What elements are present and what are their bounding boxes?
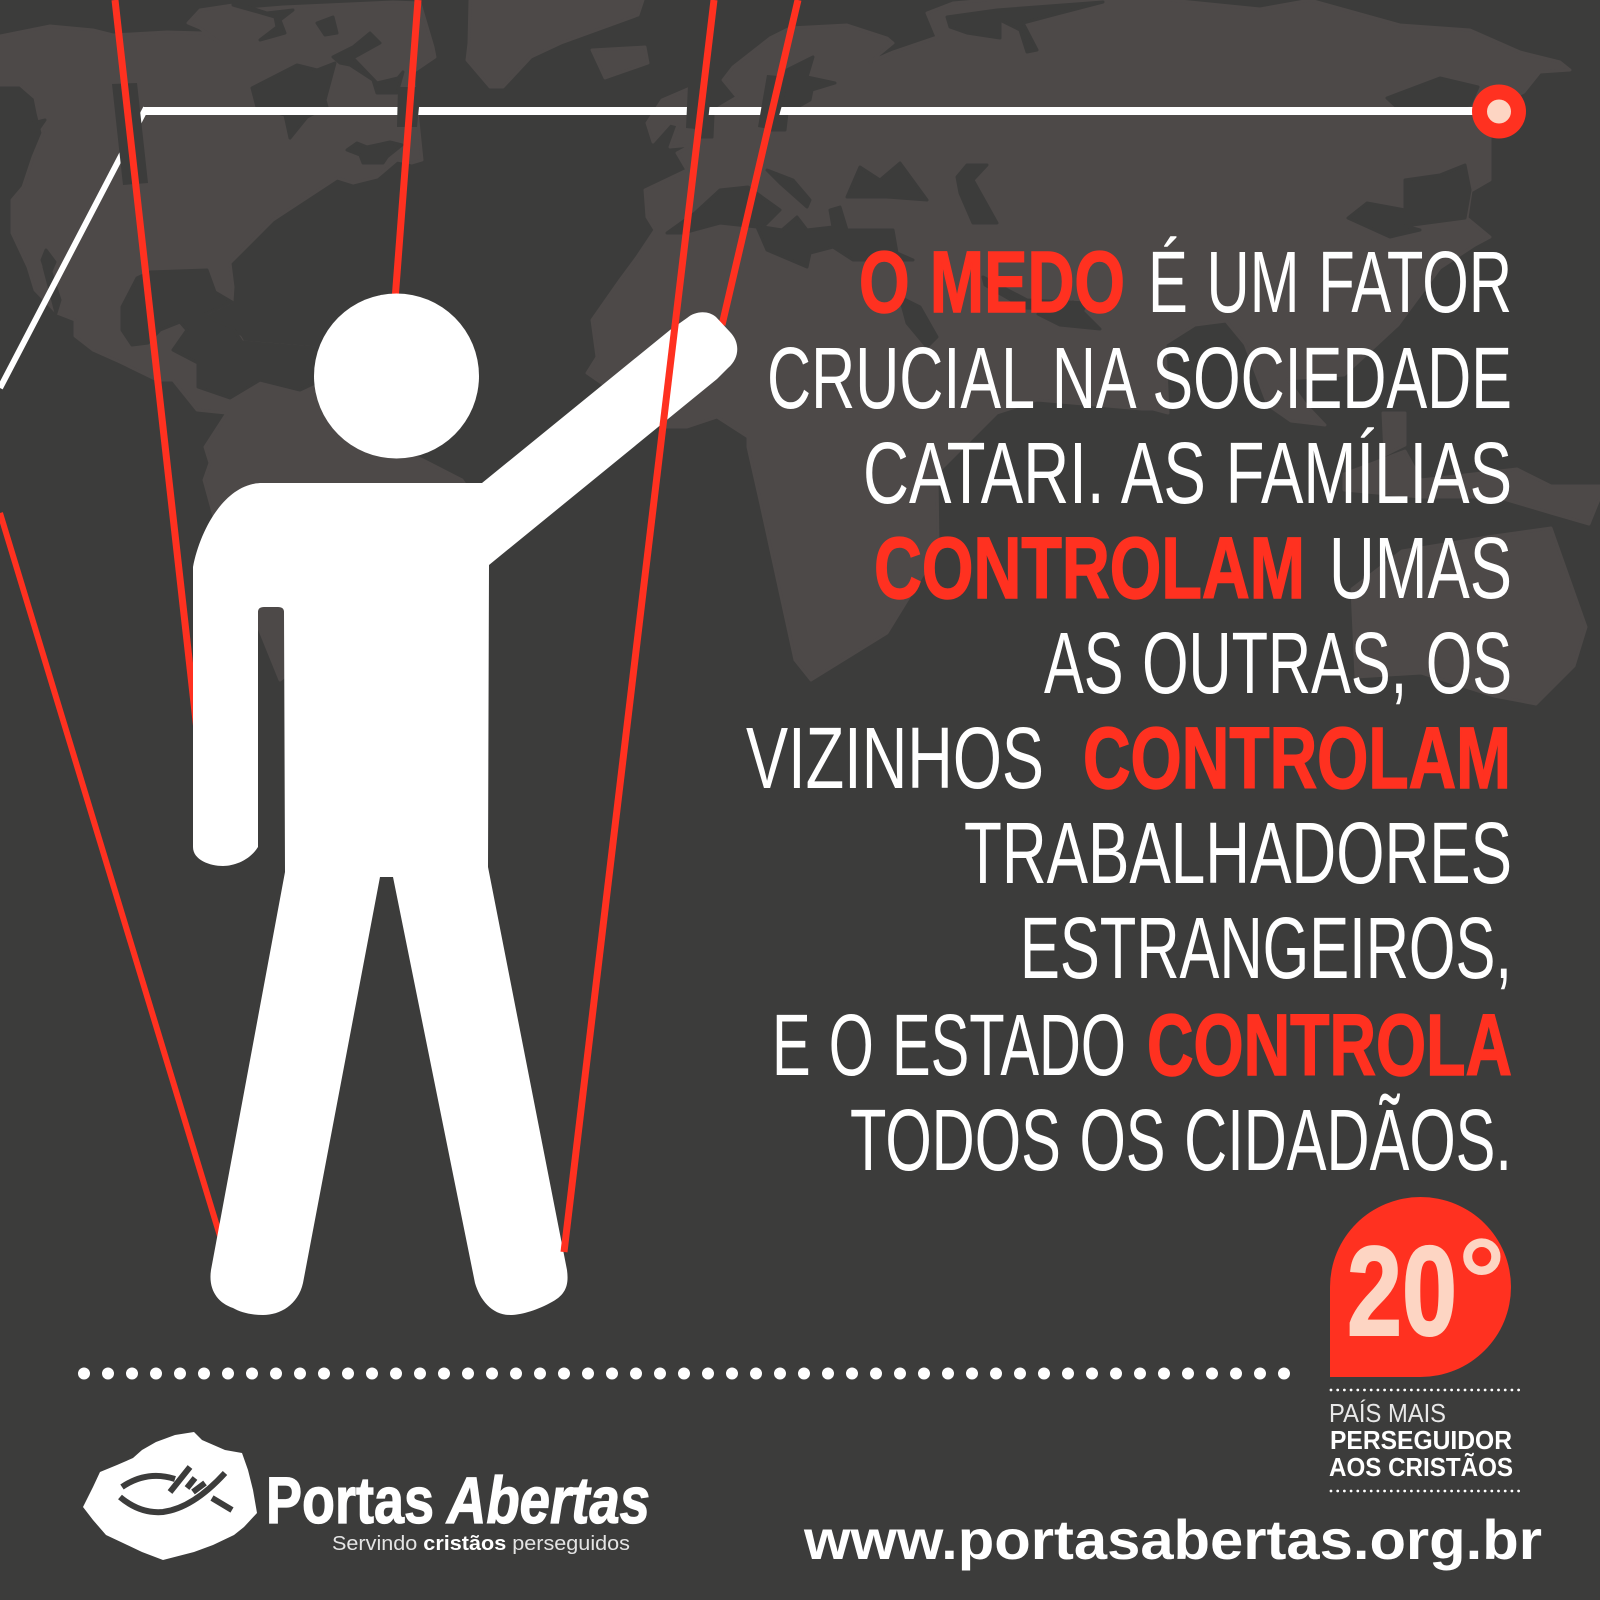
main text block: O MEDO bbox=[859, 234, 1125, 331]
rank caption bbox=[1329, 1390, 1520, 1491]
main text block: VIZINHOS bbox=[746, 710, 1044, 807]
world map bbox=[0, 0, 1600, 704]
rank badge: 20th: 20 bbox=[1347, 1220, 1457, 1362]
rank badge: 20th bbox=[1330, 1197, 1511, 1377]
logo wordmark: Abertas bbox=[445, 1463, 650, 1537]
rank caption: AOS CRISTÃOS bbox=[1329, 1452, 1513, 1482]
rank caption: PERSEGUIDOR bbox=[1330, 1425, 1512, 1455]
logo: Portas Abertas bbox=[83, 1432, 650, 1560]
rank caption: PAÍS MAIS bbox=[1329, 1398, 1446, 1428]
main text block: CONTROLAM bbox=[874, 520, 1305, 617]
logo wordmark bbox=[266, 1463, 650, 1537]
main text block bbox=[746, 234, 1512, 1189]
rank badge: 20th: ° bbox=[1458, 1214, 1506, 1347]
puppet figure bbox=[193, 294, 737, 1315]
map pin bbox=[1472, 84, 1526, 138]
string shadows over white line bbox=[112, 75, 790, 185]
website url: www.portasabertas.org.br bbox=[803, 1508, 1542, 1571]
puppet strings behind figure bbox=[0, 0, 798, 1236]
logo stone with fish bbox=[83, 1432, 257, 1560]
main text block: E O ESTADO bbox=[772, 997, 1126, 1094]
logo tagline: Servindo cristãos perseguidos bbox=[332, 1533, 630, 1555]
main text block: UMAS bbox=[1329, 520, 1512, 617]
large dotted divider bbox=[84, 1368, 1290, 1380]
white line to map pin bbox=[0, 107, 1495, 388]
logo wordmark: Portas bbox=[266, 1463, 434, 1537]
puppet string over arm bbox=[564, 0, 714, 1252]
